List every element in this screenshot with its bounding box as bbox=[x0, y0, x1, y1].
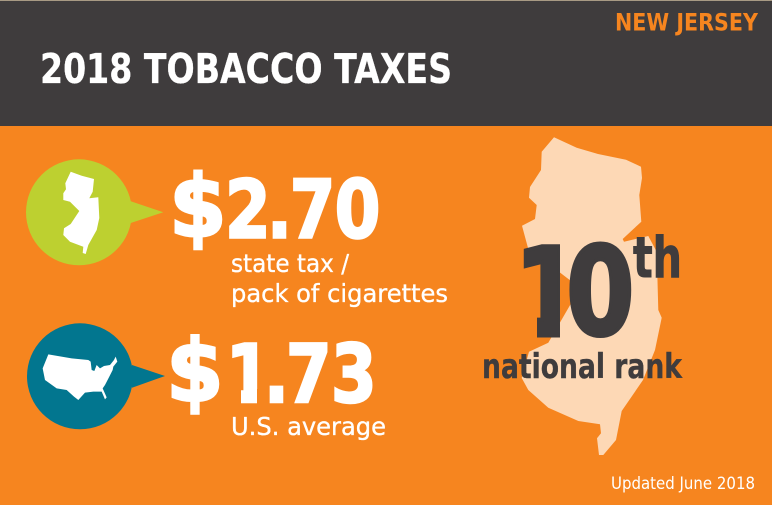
rank number bbox=[524, 242, 632, 338]
state tax amount: 2.70 bbox=[225, 164, 380, 257]
title: 2018 TOBACCO TAXES bbox=[40, 45, 452, 93]
U.S. average amount bbox=[171, 334, 372, 415]
U.S. average amount: .73 bbox=[264, 329, 377, 422]
U.S. average amount: 1 bbox=[226, 329, 271, 422]
rank suffix: th bbox=[633, 226, 682, 291]
rank number: 0 bbox=[566, 222, 634, 364]
state tax caption: state tax / bbox=[231, 249, 350, 278]
state tax amount bbox=[169, 156, 380, 257]
rank number: 1 bbox=[514, 223, 582, 365]
update note: Updated June 2018 bbox=[611, 474, 755, 494]
rank caption: national rank bbox=[482, 347, 683, 387]
U.S. average caption: U.S. average bbox=[231, 412, 386, 441]
state tax caption: pack of cigarettes bbox=[231, 279, 448, 308]
state tax caption bbox=[231, 249, 448, 308]
header band bbox=[0, 0, 772, 126]
icon: New Jersey speech bubble bbox=[26, 159, 163, 265]
map: New Jersey bbox=[522, 137, 662, 455]
U.S. average amount: $ bbox=[167, 321, 223, 421]
state tax amount: $ bbox=[169, 156, 226, 257]
icon: United States speech bubble bbox=[27, 323, 165, 429]
